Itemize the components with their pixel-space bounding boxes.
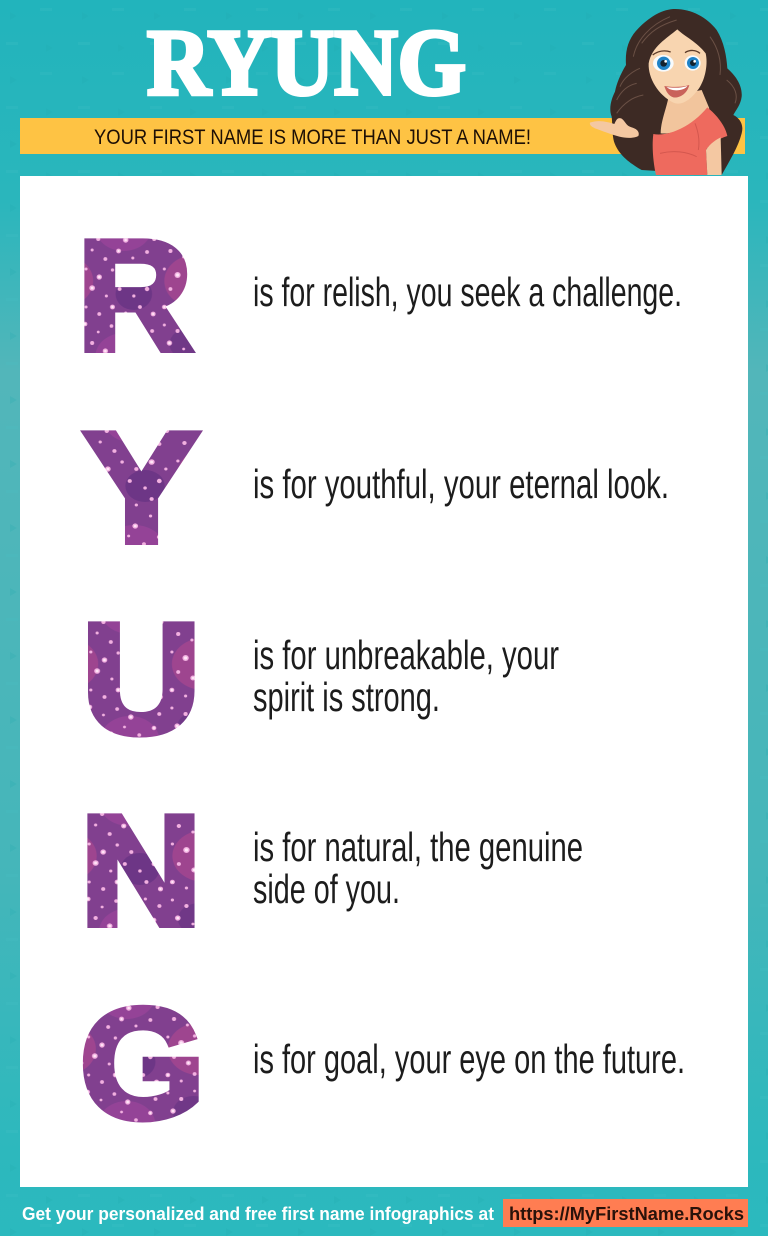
footer text: Get your personalized and free first name infographics at <box>22 1204 494 1224</box>
text U <box>253 632 559 720</box>
hair highlights <box>617 17 736 113</box>
mouth <box>664 85 689 98</box>
url badge <box>503 1199 748 1227</box>
row: Y <box>85 402 669 574</box>
text N: side of you. <box>253 866 400 912</box>
letter Y: Y <box>85 402 198 574</box>
row: R <box>78 209 682 383</box>
row: N <box>80 785 583 958</box>
url badge: https://MyFirstName.Rocks <box>509 1204 744 1224</box>
eyes <box>653 55 701 72</box>
title: RYUNG <box>147 11 466 115</box>
hand <box>590 118 639 138</box>
banner: YOUR FIRST NAME IS MORE THAN JUST A NAME! <box>94 126 531 149</box>
text N <box>253 824 583 912</box>
face <box>649 29 707 104</box>
shirt <box>653 107 727 175</box>
lower arm <box>706 137 722 175</box>
illustration: woman <box>590 9 742 175</box>
white panel <box>20 176 748 1187</box>
neck and chest <box>661 90 709 133</box>
banner <box>20 118 745 154</box>
shirt folds <box>660 123 699 157</box>
row: U <box>82 592 559 765</box>
letter U: U <box>82 592 200 765</box>
hair <box>610 9 742 175</box>
text U: spirit is strong. <box>253 674 440 720</box>
letter N: N <box>80 785 201 958</box>
letter G: G <box>80 978 204 1151</box>
eyebrows <box>653 50 700 55</box>
footer <box>22 1199 748 1227</box>
letter R: R <box>78 209 192 383</box>
text N: is for natural, the genuine <box>253 824 583 870</box>
text U: is for unbreakable, your <box>253 632 559 678</box>
row: G <box>80 978 685 1151</box>
